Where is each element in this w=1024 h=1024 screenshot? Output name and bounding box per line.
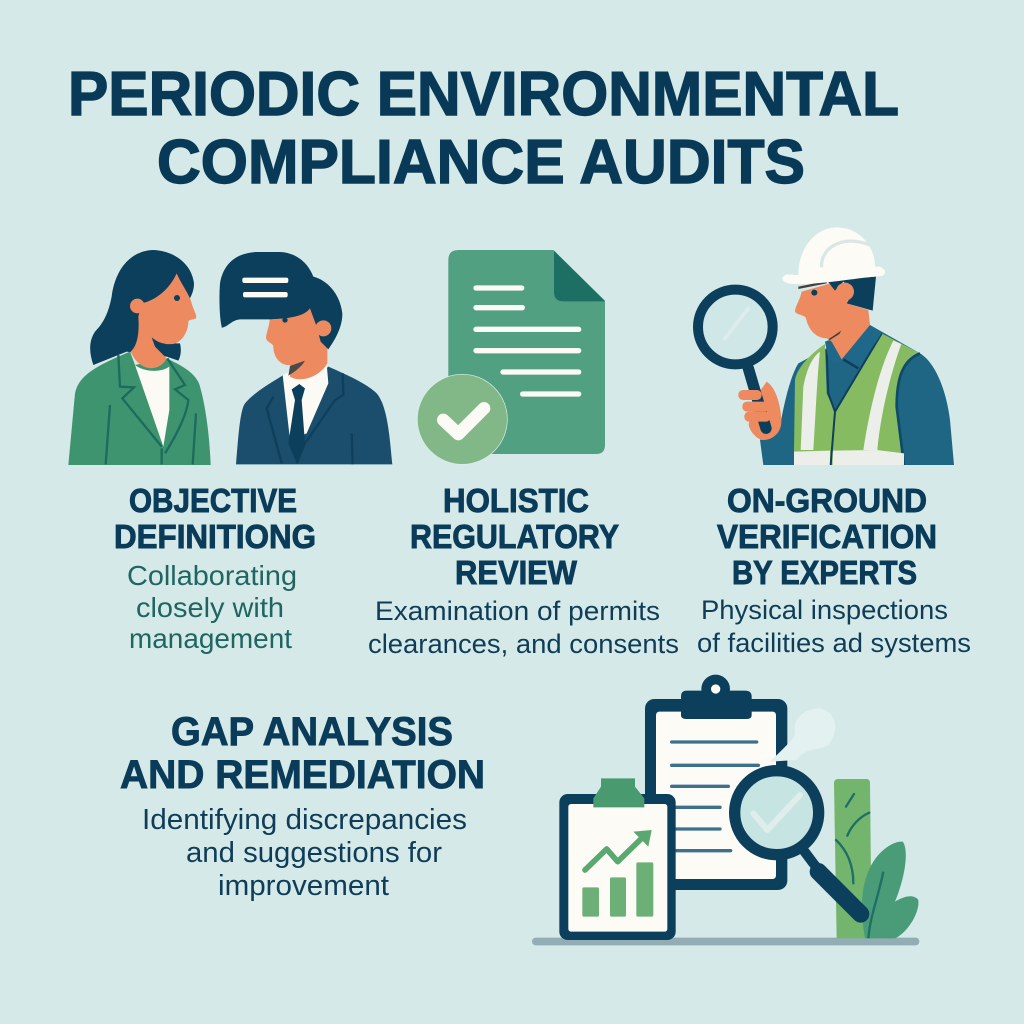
text: physical inspections: Physical inspections (701, 595, 948, 625)
heading: holistic regulatory review: REGULATORY (410, 518, 619, 555)
text: identifying discrepancies: and suggestions for (186, 837, 442, 869)
text: collaborating closely with management: Collaborating (127, 560, 297, 591)
heading: on-ground verification by experts: VERIFICATION (717, 518, 937, 555)
panel: objective definition (68, 250, 392, 654)
panel: holistic regulatory review (368, 250, 679, 659)
icon: document with check badge (417, 250, 605, 464)
text: examination of permits (368, 596, 679, 659)
text: identifying discrepancies: improvement (218, 870, 389, 902)
heading: gap analysis and remediation: AND REMEDIATION (120, 753, 485, 797)
text: examination of permits: clearances, and consents (368, 629, 679, 659)
title: COMPLIANCE AUDITS (157, 128, 805, 197)
text: collaborating closely with management (127, 560, 297, 654)
heading: objective definitiong (114, 482, 316, 555)
heading: holistic regulatory review (410, 482, 619, 591)
text: collaborating closely with management: closely with (136, 592, 284, 623)
heading: gap analysis and remediation: GAP ANALYSIS (171, 710, 453, 754)
title: PERIODIC ENVIRONMENTAL (68, 60, 899, 129)
icon: clipboards, magnifier and plant (532, 675, 919, 945)
heading: holistic regulatory review: REVIEW (455, 554, 578, 591)
heading: on-ground verification by experts: ON-GROUND (727, 482, 927, 519)
icon: two people talking with speech bubble (68, 250, 392, 465)
heading: objective definitiong: DEFINITIONG (114, 518, 316, 555)
heading: on-ground verification by experts: BY EXPERTS (732, 554, 917, 591)
heading: objective definitiong: OBJECTIVE (129, 482, 297, 519)
panel: gap analysis and remediation (120, 675, 919, 945)
text: physical inspections (697, 595, 971, 658)
text: collaborating closely with management: management (129, 623, 292, 654)
icon: inspector with hard hat and magnifier (698, 227, 954, 465)
title (68, 60, 899, 197)
text: examination of permits: Examination of permits (375, 596, 660, 626)
heading: on-ground verification by experts (717, 482, 937, 591)
text: physical inspections: of facilities ad systems (697, 628, 971, 658)
heading: holistic regulatory review: HOLISTIC (443, 482, 589, 519)
text: identifying discrepancies: Identifying discrepancies (142, 804, 467, 836)
panel: on-ground verification (697, 227, 971, 658)
heading: gap analysis and remediation (120, 710, 485, 797)
text: identifying discrepancies (142, 804, 467, 902)
